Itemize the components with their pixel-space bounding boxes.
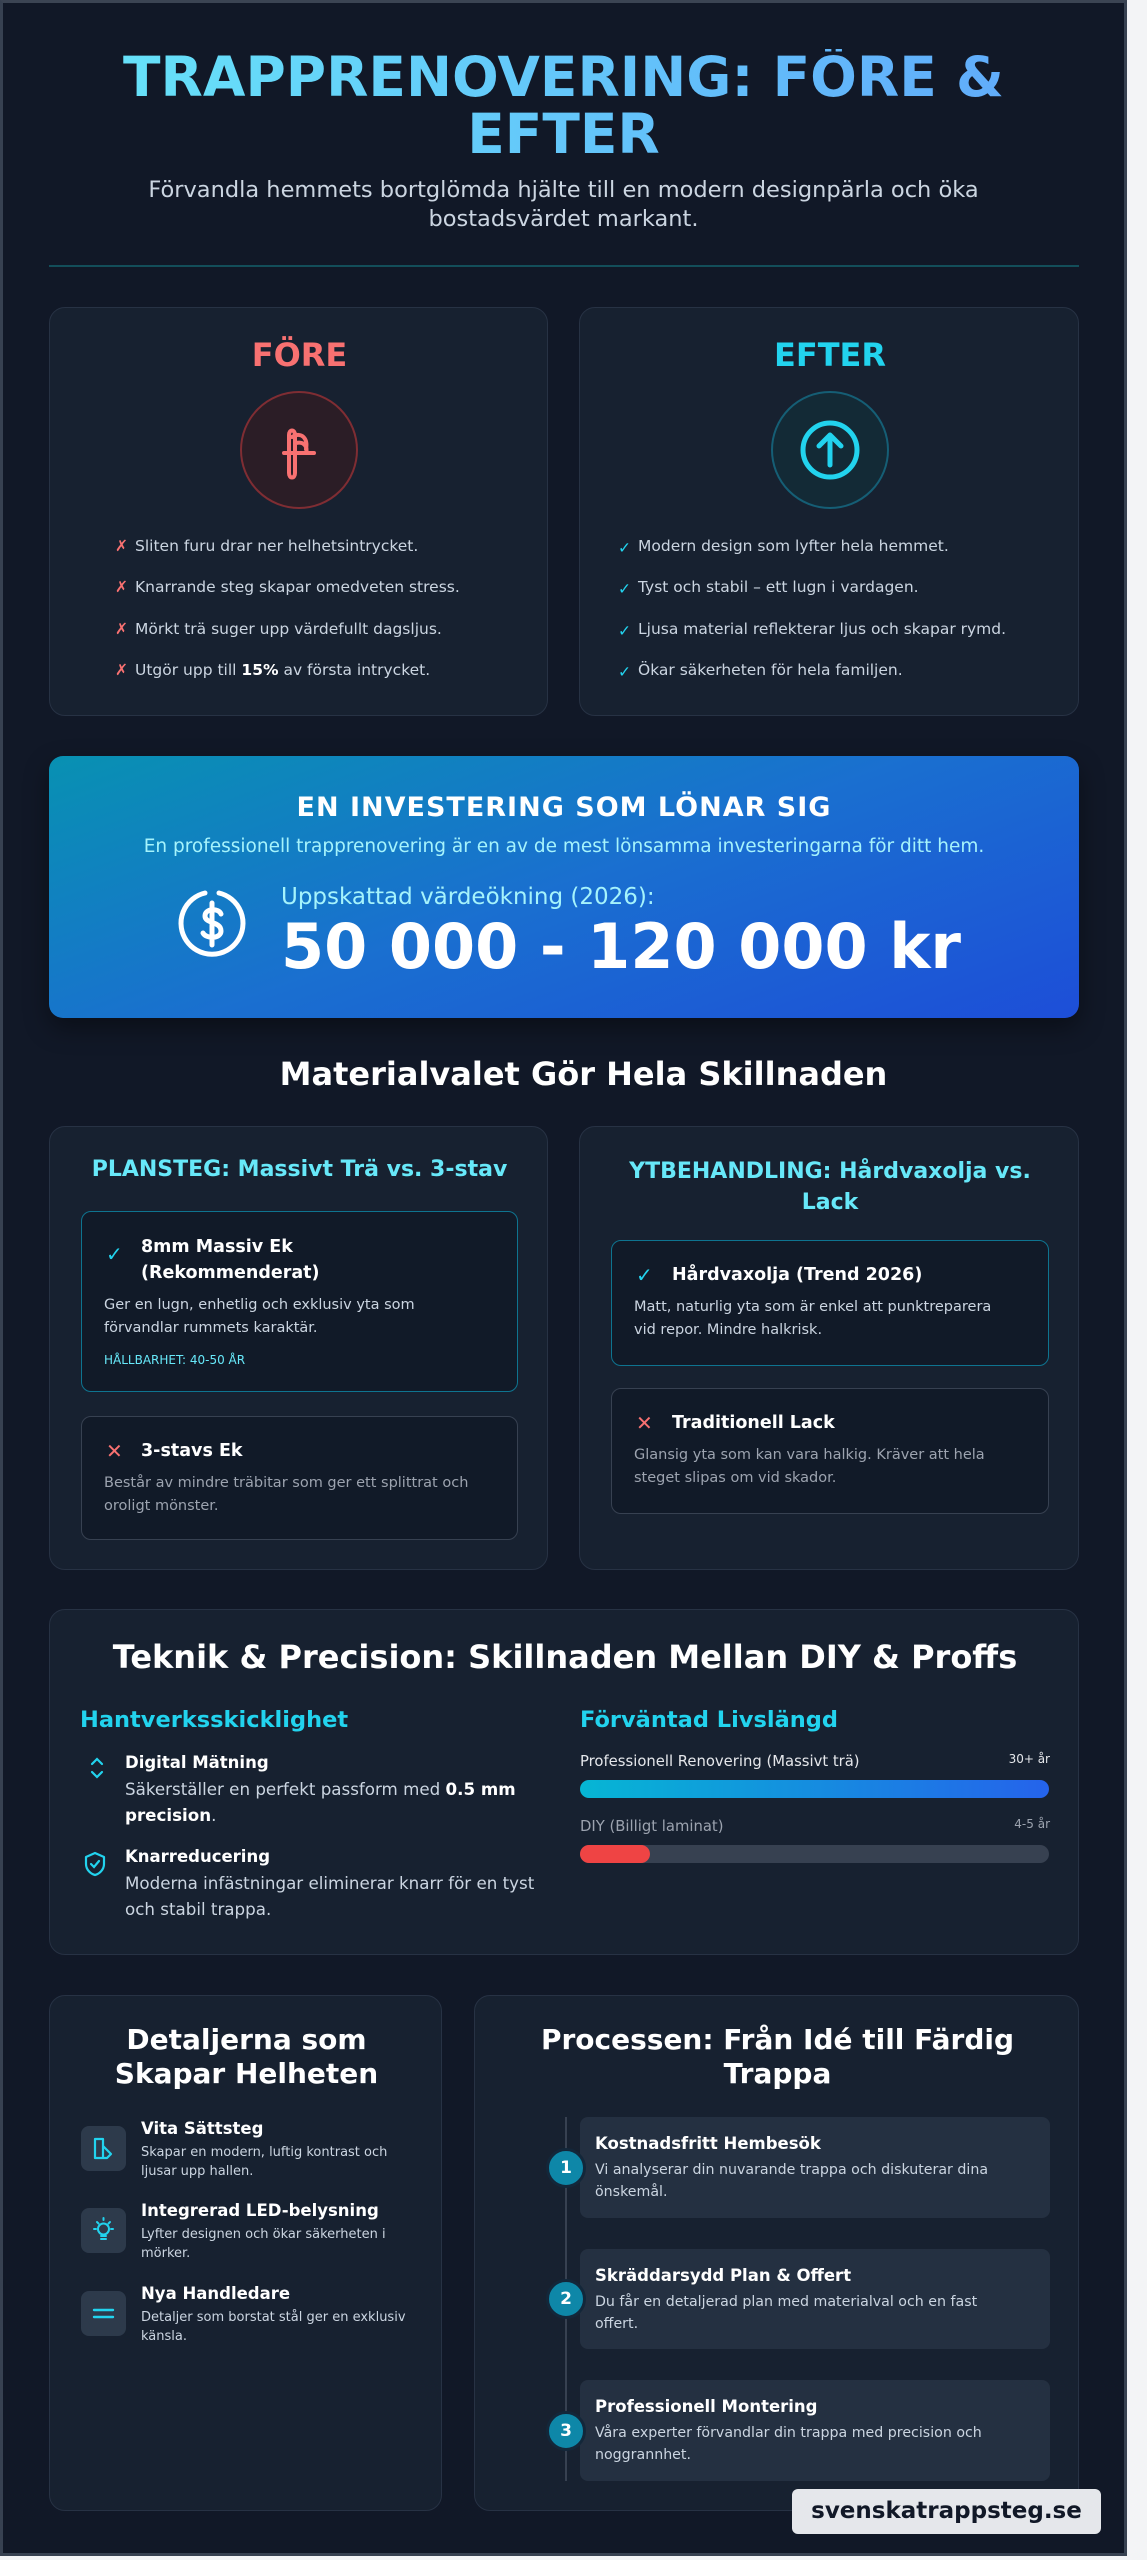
option: hårdvaxolja: ✓ [636, 1263, 653, 1287]
item: handledare: Nya Handledare [141, 2284, 290, 2303]
option: massiv ek: ✓ [106, 1242, 123, 1266]
list: efter: ✓ [618, 622, 631, 640]
heading: investment: EN INVESTERING SOM LÖNAR SIG [297, 792, 831, 823]
icon: money [178, 890, 246, 957]
heading: efter: EFTER [774, 336, 886, 374]
step 1: Vi analyserar din nuvarande trappa och diskuterar dina [595, 2162, 988, 2178]
item: handledare: Detaljer som borstat stål ger en exklusiv [141, 2310, 406, 2325]
step 2 [546, 2249, 1050, 2349]
heading: detaljerna [115, 2023, 378, 2090]
option: lack: Traditionell Lack [672, 1413, 835, 1433]
item: led: mörker. [141, 2246, 190, 2261]
step 3: noggrannhet. [595, 2447, 691, 2463]
step 2: Du får en detaljerad plan med materialval och en fast [595, 2294, 977, 2310]
heading: teknik: Teknik & Precision: Skillnaden Mellan DIY & Proffs [113, 1638, 1017, 1676]
item: handledare: känsla. [141, 2329, 187, 2344]
panel: plansteg [49, 1126, 548, 1570]
subheading: hantverk: Hantverksskicklighet [80, 1707, 348, 1733]
heading: detaljerna: Detaljerna som [126, 2023, 367, 2056]
step 3: Professionell Montering [595, 2397, 818, 2416]
heading: processen: Processen: Från Idé till Färdig [541, 2023, 1014, 2056]
stat: value range: 50 000 - 120 000 kr [281, 910, 961, 983]
heading: detaljerna: Skapar Helheten [115, 2057, 378, 2090]
step 3: 3 [560, 2421, 572, 2441]
chart: lifespan bars: 30+ år [1009, 1752, 1050, 1766]
option: 3-stavs ek [81, 1416, 518, 1540]
title [0, 49, 1127, 163]
step 3: Våra experter förvandlar din trappa med precision och [595, 2425, 982, 2441]
panel: processen [474, 1995, 1079, 2511]
list: efter: ✓ [618, 539, 631, 557]
heading: ytbehandling: YTBEHANDLING: Hårdvaxolja vs. [629, 1159, 1031, 1184]
list: före: Knarrande steg skapar omedveten stress. [135, 578, 460, 596]
option: massiv ek: förvandlar rummets karaktär. [104, 1320, 318, 1336]
step 2: offert. [595, 2316, 638, 2332]
heading: ytbehandling: Lack [802, 1190, 858, 1215]
item: digital mätning: Digital Mätning [125, 1753, 269, 1772]
heading: processen [541, 2023, 1014, 2090]
subtitle [148, 177, 979, 232]
list: före: ✗ [115, 578, 128, 596]
list: före: ✗ [115, 537, 128, 555]
option: 3-stavs ek: oroligt mönster. [104, 1498, 219, 1514]
option: hårdvaxolja [611, 1240, 1049, 1366]
list: före [115, 537, 460, 679]
option: massiv ek: Ger en lugn, enhetlig och exklusiv yta som [104, 1297, 415, 1313]
option: 3-stavs ek: 3-stavs Ek [141, 1441, 243, 1461]
heading: processen: Trappa [724, 2057, 831, 2090]
item: vita sättsteg: Vita Sättsteg [141, 2119, 263, 2138]
step 2: 2 [560, 2289, 572, 2309]
list: efter: ✓ [618, 580, 631, 598]
panel: teknik [49, 1609, 1079, 1955]
subtitle: bostadsvärdet markant. [428, 206, 699, 232]
panel: före [49, 307, 548, 716]
item: vita sättsteg [81, 2119, 387, 2179]
item: knarreducering: Knarreducering [125, 1847, 270, 1866]
option: lack [611, 1388, 1049, 1514]
chart: lifespan bars: DIY (Billigt laminat) [580, 1818, 724, 1835]
heading: plansteg: PLANSTEG: Massivt Trä vs. 3-stav [92, 1157, 507, 1182]
list: efter: Modern design som lyfter hela hemmet. [638, 537, 949, 555]
item: handledare [81, 2284, 406, 2344]
list: före: ✗ [115, 661, 128, 679]
option: massiv ek [81, 1211, 518, 1392]
option: lack: ✕ [636, 1411, 653, 1435]
option: lack: Glansig yta som kan vara halkig. Kräver att hela [634, 1447, 985, 1463]
panel: efter [579, 307, 1079, 716]
footer badge [792, 2489, 1101, 2534]
item: digital mätning [90, 1753, 516, 1825]
option: massiv ek: (Rekommenderat) [141, 1263, 320, 1283]
icon: arrow up [771, 391, 889, 509]
item: led: Integrerad LED-belysning [141, 2201, 379, 2220]
chart: lifespan bars: 4-5 år [1014, 1817, 1050, 1831]
option: 3-stavs ek: Består av mindre träbitar som ger ett splittrat och [104, 1475, 468, 1491]
item: vita sättsteg: Skapar en modern, luftig kontrast och [141, 2145, 387, 2160]
heading: före: FÖRE [252, 336, 347, 374]
heading: ytbehandling [629, 1158, 1031, 1215]
option: hårdvaxolja: vid repor. Mindre halkrisk. [634, 1322, 822, 1338]
option: hårdvaxolja: Hårdvaxolja (Trend 2026) [672, 1265, 922, 1285]
item: vita sättsteg: ljusar upp hallen. [141, 2164, 253, 2179]
step 1: Kostnadsfritt Hembesök [595, 2134, 821, 2153]
option: lack: steget slipas om vid skador. [634, 1470, 836, 1486]
list: efter: Ökar säkerheten för hela familjen. [638, 661, 903, 679]
title: EFTER [467, 102, 660, 166]
chart: lifespan bars: Professionell Renovering (Massivt trä) [580, 1753, 860, 1770]
step 1: 1 [560, 2158, 572, 2178]
step 1: önskemål. [595, 2184, 667, 2200]
step 2: Skräddarsydd Plan & Offert [595, 2266, 851, 2285]
list: efter: Ljusa material reflekterar ljus och skapar rymd. [638, 620, 1006, 638]
footer badge: svenskatrappsteg.se [811, 2498, 1082, 2524]
subtitle: Förvandla hemmets bortglömda hjälte till en modern designpärla och öka [148, 177, 979, 203]
icon: worn stairs [240, 391, 358, 509]
heading: materialvalet: Materialvalet Gör Hela Skillnaden [280, 1055, 887, 1093]
list: före: Mörkt trä suger upp värdefullt dagsljus. [135, 620, 442, 638]
list: efter [618, 537, 1006, 681]
item: knarreducering: Moderna infästningar eliminerar knarr för en tyst [125, 1873, 534, 1893]
item: knarreducering: och stabil trappa. [125, 1899, 271, 1919]
item: led [81, 2201, 386, 2261]
option: massiv ek: HÅLLBARHET: 40-50 ÅR [104, 1353, 245, 1367]
list: efter: ✓ [618, 663, 631, 681]
item: led: Lyfter designen och ökar säkerheten i [141, 2227, 386, 2242]
step 1 [546, 2117, 1050, 2218]
option: hårdvaxolja: Matt, naturlig yta som är enkel att punktreparera [634, 1299, 991, 1315]
item: knarreducering [84, 1847, 534, 1919]
text: value label: Uppskattad värdeökning (2026): [281, 884, 655, 910]
list: före: ✗ [115, 620, 128, 638]
panel: ytbehandling [579, 1126, 1079, 1570]
subheading: livslängd: Förväntad Livslängd [580, 1707, 838, 1733]
list: efter: Tyst och stabil – ett lugn i vardagen. [638, 578, 919, 596]
list: före: Sliten furu drar ner helhetsintrycket. [135, 537, 418, 555]
step 3 [546, 2380, 1050, 2481]
option: massiv ek: 8mm Massiv Ek [141, 1237, 293, 1257]
option: 3-stavs ek: ✕ [106, 1439, 123, 1463]
chart: lifespan bars [580, 1752, 1050, 1863]
list: före: Utgör upp till 15% av första intrycket. [135, 661, 430, 679]
title: TRAPPRENOVERING: FÖRE & [123, 45, 1004, 109]
panel: investment banner [49, 756, 1079, 1018]
text: investment subtitle: En professionell trapprenovering är en av de mest lönsamma investeringarna för ditt hem. [144, 836, 984, 857]
panel: detaljerna [49, 1995, 442, 2511]
item: digital mätning: Säkerställer en perfekt passform med 0.5 mm [125, 1779, 516, 1799]
item: digital mätning: precision. [125, 1805, 216, 1825]
